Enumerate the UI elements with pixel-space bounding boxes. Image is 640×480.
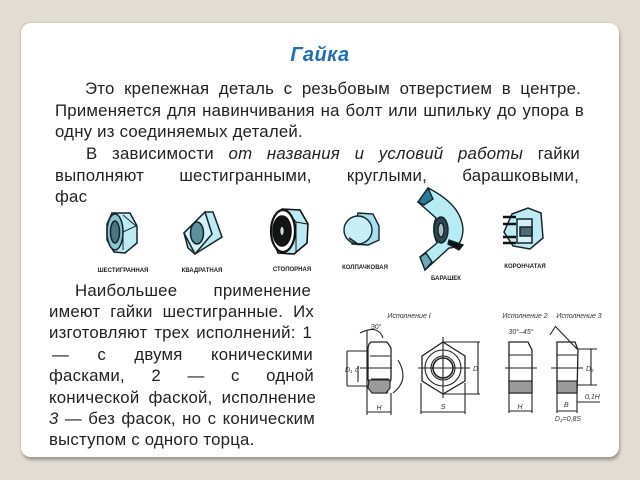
text block: most common nuts: фасками, 2 — с одной [49, 366, 314, 385]
label: wing: БАРАШЕК [431, 276, 461, 282]
drawing: execution 2 [502, 313, 548, 413]
icon: wing nut [418, 188, 463, 270]
drawing: execution 1 side view [345, 313, 431, 415]
text block: most common nuts [49, 281, 316, 449]
drawing: execution 1 side view: d [355, 367, 360, 374]
text block: definition: В зависимости от названия и условий работы гайки [86, 144, 580, 163]
text block: most common nuts: 3 — без фасок, но с коническим [49, 409, 315, 428]
drawing: execution 3: B [564, 402, 569, 409]
drawing: execution 3: Исполнение 3 [556, 313, 602, 320]
drawing: execution 2: H [517, 404, 523, 411]
drawing: execution 1 side view: Исполнение I [387, 313, 431, 320]
icon: hexagonal nut [107, 213, 137, 253]
icon: castle nut [503, 208, 543, 249]
drawing: execution 3: D₂=0,8S [555, 416, 581, 423]
text block: definition: Это крепежная деталь с резьбовым отверстием в центре. [85, 79, 581, 98]
label: castle: КОРОНЧАТАЯ [504, 264, 546, 270]
text block: most common nuts: Наибольшее применение [75, 281, 311, 300]
drawing: execution 1 side view: H [376, 405, 382, 412]
icon: cap nut [344, 213, 379, 245]
title: Гайка [290, 44, 350, 66]
text block: definition: одну из соединяемых деталей. [55, 122, 303, 141]
drawing: execution 1 side view: D₁ [345, 367, 353, 374]
text block: most common nuts: имеют гайки шестигранные. Их [49, 302, 314, 321]
drawing: execution 2: Исполнение 2 [502, 313, 548, 320]
text block: most common nuts: — с двумя коническими [52, 345, 313, 364]
text block: most common nuts: конической фаской, исполнение [49, 388, 316, 407]
label: hexagonal: ШЕСТИГРАННАЯ [98, 268, 148, 274]
text block: definition [55, 79, 584, 206]
drawing: execution 3: 30°–45° [508, 328, 534, 336]
drawing: execution 3: 0,1H [585, 394, 601, 401]
icon: lock nut [271, 209, 308, 254]
drawing: execution 3: D₂ [586, 366, 594, 373]
drawing: execution 3 [508, 313, 602, 423]
label: lock: СТОПОРНАЯ [273, 267, 311, 273]
text block: definition: выполняют шестигранными, круглыми, барашковыми, [55, 166, 579, 185]
drawing: execution 1 front view: D [473, 366, 478, 373]
text block: definition: Применяется для навинчивания на болт или шпильку до упора в [55, 101, 584, 120]
technical drawings [345, 313, 602, 423]
text block: definition: фас [55, 187, 87, 206]
drawing: execution 1 front view: S [441, 404, 446, 411]
drawing: execution 1 front view [418, 337, 480, 414]
text block: most common nuts: выступом с одного торца. [49, 430, 254, 449]
label: cap: КОЛПАЧКОВАЯ [342, 265, 388, 271]
icon: square nut [184, 212, 222, 254]
label: square: КВАДРАТНАЯ [182, 268, 222, 274]
text block: most common nuts: изготовляют трех исполнений: 1 [49, 323, 312, 342]
drawing: execution 1 side view: 30° [371, 323, 382, 331]
